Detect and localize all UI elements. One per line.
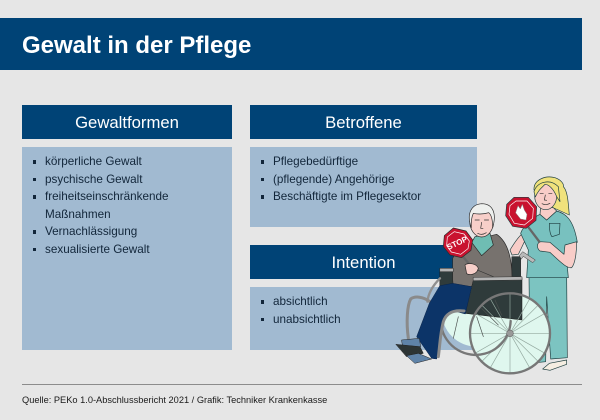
list item: psychische Gewalt: [45, 172, 142, 186]
panel: Gewaltformen heading: [22, 105, 232, 139]
list item: sexualisierte Gewalt: [45, 242, 150, 256]
list item: [33, 190, 168, 220]
panel: Betroffene list: [250, 147, 477, 227]
hub: [507, 330, 513, 337]
panel: Betroffene heading: [250, 105, 477, 139]
sign pole: [528, 227, 539, 242]
panel: Gewaltformen list: [22, 147, 232, 350]
man torso: [453, 234, 512, 287]
hand stop sign: [506, 197, 537, 228]
push handle: [519, 252, 535, 263]
trousers: [529, 277, 567, 363]
leg: [417, 283, 472, 359]
list item: absichtlich: [273, 295, 328, 308]
spokes: [453, 293, 550, 373]
list item: (pflegende) Angehörige: [273, 172, 395, 186]
front panel of seat: [465, 278, 522, 320]
panel: Intention heading: Intention: [331, 253, 396, 272]
list item: freiheitseinschränkende: [45, 190, 168, 203]
man hair: [469, 204, 494, 228]
panel: Intention list: [250, 287, 477, 350]
list item: Vernachlässigung: [45, 225, 137, 238]
shoes: [543, 360, 567, 370]
man collar: [472, 233, 493, 256]
backrest and seat: [440, 257, 521, 287]
rear wheel pale disc: [442, 277, 512, 347]
ponytail and hair back: [534, 177, 569, 215]
list item: Beschäftigte im Pflegesektor: [273, 190, 421, 203]
panel: Intention heading: [250, 245, 477, 279]
left arm: [510, 233, 526, 255]
stop sign: STOP: [446, 234, 470, 252]
fringe: [534, 182, 560, 202]
man hand and sign: [443, 228, 493, 277]
list item: Maßnahmen: [45, 208, 111, 220]
front wheel pale disc: [470, 293, 550, 373]
footer rule: [22, 384, 582, 385]
list item: unabsichtlich: [273, 312, 341, 326]
armrests: [440, 268, 522, 281]
face: [535, 182, 557, 210]
neck: [540, 207, 557, 220]
source line: Quelle: PEKo 1.0-Abschlussbericht 2021 / Grafik: Techniker Krankenkasse: [22, 395, 327, 405]
panel: Gewaltformen heading: Gewaltformen: [75, 113, 179, 132]
title banner: [0, 18, 582, 70]
nurse: [506, 177, 577, 370]
push frame: [427, 278, 440, 302]
man head: [470, 205, 494, 237]
rear wheel rim: [441, 312, 511, 355]
front wheel rim: [470, 293, 550, 373]
front frame: [438, 311, 464, 357]
title: Gewalt in der Pflege: [22, 32, 251, 59]
list item: körperliche Gewalt: [45, 155, 142, 168]
pocket: [549, 223, 560, 237]
panel: Betroffene heading: Betroffene: [325, 113, 402, 132]
tunic: [521, 211, 577, 278]
illustration: wheelchair user and nurse with stop signs: [396, 176, 578, 374]
footrest shoes: [396, 338, 432, 363]
list item: Pflegebedürftige: [273, 155, 358, 168]
forearm and hand: [538, 242, 577, 268]
